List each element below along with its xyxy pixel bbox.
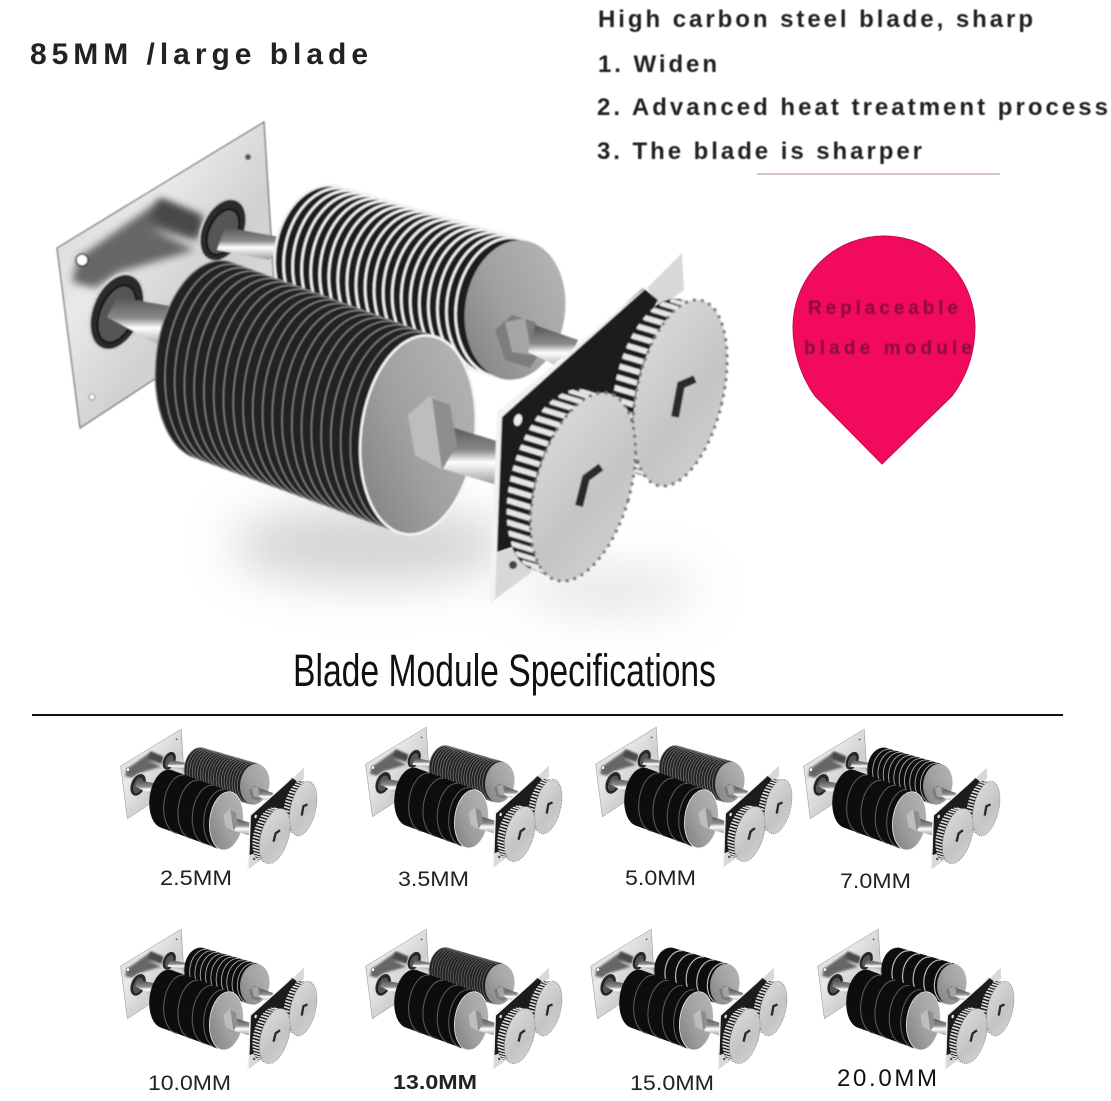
module 7.0MM	[804, 729, 1005, 893]
feature list	[597, 6, 1108, 165]
callout text	[804, 298, 972, 359]
module 5.0MM: 5.0MM	[625, 867, 696, 890]
module 15.0MM: 15.0MM	[630, 1072, 714, 1095]
pink underline	[757, 173, 1000, 175]
callout text: Replaceable	[808, 298, 958, 319]
feature list: 1. Widen	[598, 51, 717, 78]
main blade module illustration	[57, 122, 743, 604]
feature list: 2. Advanced heat treatment process	[597, 94, 1108, 121]
back gear	[598, 291, 743, 495]
feature list: High carbon steel blade, sharp	[598, 6, 1033, 33]
front blade roller	[144, 254, 477, 538]
module 10.0MM	[121, 929, 322, 1095]
section divider	[32, 714, 1063, 716]
module 3.5MM	[366, 727, 567, 891]
front roller face, nut, shaft, right plate and gears	[349, 253, 743, 604]
back roller face, nut and shaft	[456, 234, 578, 386]
module 15.0MM	[591, 929, 792, 1095]
left mounting plate, bearings and shafts	[57, 122, 280, 428]
back blade roller	[266, 179, 565, 384]
shadow under main module	[230, 507, 700, 608]
feature list: 3. The blade is sharper	[597, 138, 922, 165]
front gear	[489, 379, 655, 593]
module 5.0MM	[596, 727, 797, 890]
module 20.0MM	[818, 929, 1019, 1092]
module 7.0MM: 7.0MM	[840, 870, 911, 893]
module 20.0MM: 20.0MM	[837, 1065, 937, 1092]
module 10.0MM: 10.0MM	[148, 1072, 231, 1095]
heading: 85MM large blade: 85MM /large blade	[30, 38, 368, 71]
module 13.0MM	[366, 929, 567, 1094]
right mounting plate	[490, 253, 684, 604]
module 2.5MM	[121, 729, 322, 890]
module 2.5MM: 2.5MM	[160, 867, 232, 890]
module 3.5MM: 3.5MM	[398, 868, 469, 891]
pink callout drop	[793, 236, 975, 464]
callout text: blade module	[804, 338, 972, 359]
section title: Blade Module Specifications	[293, 645, 716, 696]
module 13.0MM: 13.0MM	[393, 1072, 477, 1094]
